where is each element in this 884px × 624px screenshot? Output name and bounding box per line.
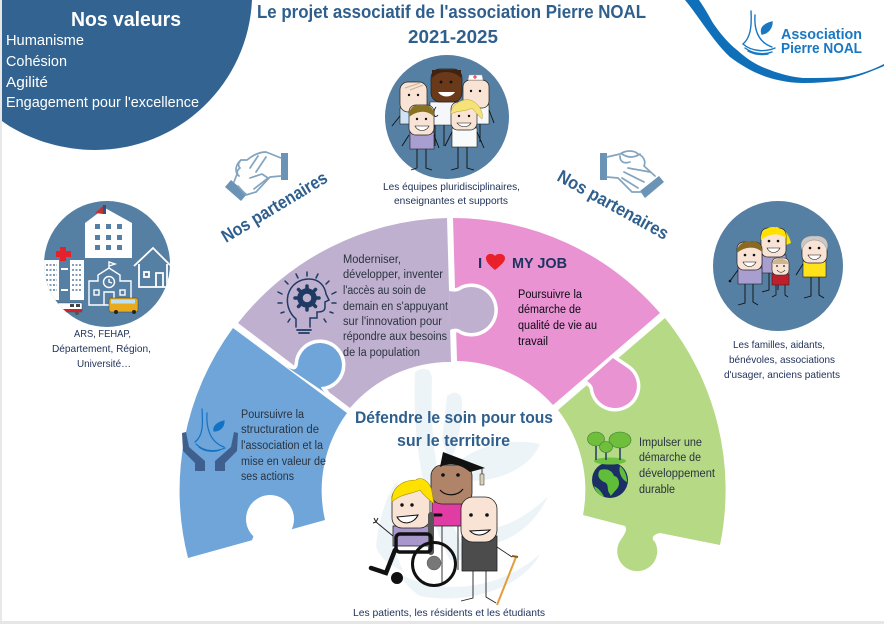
bus (109, 298, 138, 314)
caption: team: Les équipes pluridisciplinaires, (383, 181, 520, 193)
school (89, 262, 131, 305)
caption: patients: Les patients, les résidents et les étudiants (353, 607, 545, 619)
text: développement durable: développement (639, 468, 716, 480)
notch in the blue piece (246, 495, 294, 543)
i love my job: MY JOB (512, 255, 567, 272)
values list: Agilité (6, 74, 48, 91)
caption: families (724, 339, 840, 381)
doctor (430, 69, 463, 146)
text: moderniser: de la population (343, 347, 420, 359)
icon: team circle (385, 55, 509, 179)
icon: trees on globe (588, 432, 631, 498)
main building (85, 208, 132, 258)
text: structuration: l'association et la (241, 440, 324, 452)
wheelchair (371, 515, 456, 586)
panel: pink puzzle piece (453, 218, 660, 408)
text: structuration: mise en valeur de (241, 456, 326, 468)
elderly man (461, 497, 518, 605)
text: développement durable (639, 437, 716, 496)
front left carer (402, 105, 439, 170)
central heading: Défendre le soin pour tous (355, 408, 553, 427)
i love my job (478, 254, 567, 272)
icon: handshake left (225, 152, 288, 201)
child (772, 258, 789, 297)
center watermark (376, 369, 548, 599)
values list: Cohésion (6, 53, 67, 70)
text: moderniser: répondre aux besoins (343, 331, 447, 343)
nurse (463, 75, 494, 142)
text: qualité de vie: Poursuivre la (518, 289, 583, 301)
blue body (180, 328, 347, 558)
pink body (453, 218, 660, 405)
i love my job: I (478, 255, 482, 272)
caption: institutions (52, 328, 151, 370)
label: nos partenaires right: Nos partenaires (554, 166, 672, 244)
caption: families: d'usager, anciens patients (724, 369, 840, 381)
text: développement durable: Impulser une (639, 437, 702, 449)
caption: institutions: Département, Région, (52, 343, 151, 355)
father (729, 241, 762, 305)
grandparent (796, 236, 828, 298)
text: qualité de vie: qualité de vie au (518, 320, 597, 332)
panel: nos valeurs (2, 0, 252, 150)
purple tab cut into pink (449, 287, 494, 333)
panel: purple puzzle piece (238, 218, 494, 408)
text: moderniser (343, 254, 449, 359)
text: qualité de vie (518, 289, 597, 348)
illustration: patients, residents and students (371, 452, 518, 605)
caption: team: enseignantes et supports (394, 195, 508, 207)
text: moderniser: l'accès au soin de (343, 285, 426, 297)
text: moderniser: sur l'innovation pour (343, 316, 442, 328)
logo swoosh and association logo (685, 0, 884, 83)
ambulance (58, 303, 82, 315)
values list: Engagement pour l'excellence (6, 94, 199, 111)
title (257, 2, 646, 47)
text: moderniser: développer, inventer (343, 269, 443, 281)
caption: families: Les familles, aidants, (733, 339, 825, 351)
pink tab cut into green (587, 358, 637, 408)
logo mark (743, 11, 775, 55)
icon: head with gear in bulb (278, 272, 336, 333)
label: nos partenaires left: Nos partenaires (218, 167, 331, 246)
heading: nos valeurs: Nos valeurs (71, 9, 181, 31)
central heading (355, 408, 553, 450)
text: moderniser: demain en s'appuyant (343, 301, 449, 313)
title: 2021-2025 (408, 27, 498, 47)
panel: blue puzzle piece (180, 328, 347, 558)
central heading: sur le territoire (397, 431, 510, 450)
student (431, 452, 485, 526)
text: développement durable: démarche de (639, 452, 701, 464)
blue tab cut into purple (287, 343, 342, 394)
house (134, 248, 171, 287)
text: moderniser: Moderniser, (343, 254, 401, 266)
blonde patient (373, 478, 434, 546)
text: structuration (241, 409, 326, 483)
text: développement durable: durable (639, 484, 675, 496)
text: structuration: structuration de (241, 424, 319, 436)
text: structuration: ses actions (241, 471, 294, 483)
icon: institutions circle (44, 201, 171, 327)
title: Le projet associatif de l'association Pierre NOAL (257, 2, 646, 22)
purple body (238, 218, 451, 408)
icon: heart (486, 254, 505, 270)
icon: hands holding logo (182, 409, 238, 471)
text: qualité de vie: travail (518, 336, 548, 348)
caption: families: bénévoles, associations (729, 354, 835, 366)
icon: families circle (713, 201, 843, 331)
text: qualité de vie: démarche de (518, 304, 581, 316)
caption: institutions: Université… (77, 358, 131, 370)
mother (761, 227, 791, 292)
caption: team (383, 181, 520, 207)
values list: Humanisme (6, 32, 84, 49)
back left carer (392, 82, 427, 126)
front right nurse (445, 100, 484, 170)
icon: handshake right (600, 151, 664, 198)
logo swoosh and association logo: Pierre NOAL (781, 40, 862, 57)
text: structuration: Poursuivre la (241, 409, 305, 421)
logo text: Association (781, 26, 862, 43)
values list (6, 32, 199, 111)
hospital (44, 260, 59, 300)
caption: institutions: ARS, FEHAP, (74, 328, 131, 340)
panel: green puzzle piece (558, 318, 726, 571)
